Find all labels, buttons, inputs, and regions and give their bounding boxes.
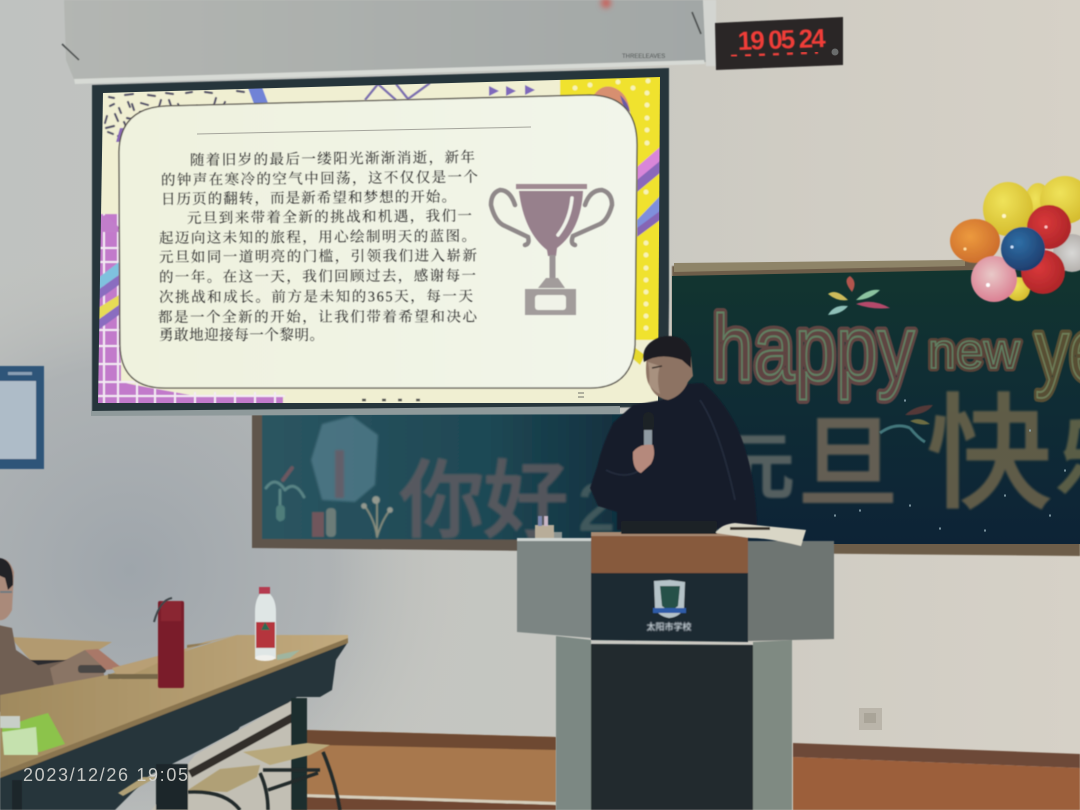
desk legs and beam	[190, 715, 297, 774]
slide body text: 随着旧岁的最后一缕阳光渐渐消逝，新年	[190, 148, 475, 169]
chalk text: happy new year: happy	[712, 296, 915, 400]
chalk text: happy new year: new	[928, 323, 1021, 379]
digital wall clock: 19 05 24	[737, 23, 827, 56]
corner purple wedge	[116, 128, 124, 142]
arrow icons	[489, 85, 535, 96]
light gap under desk	[150, 700, 292, 810]
orange semicircle	[592, 86, 630, 112]
front desk	[0, 635, 348, 810]
speaker	[590, 336, 757, 530]
chalk text: happy new year: happy	[712, 296, 915, 400]
chalk flower decoration	[828, 276, 890, 315]
digital wall clock	[715, 17, 843, 70]
projection screen	[91, 68, 669, 416]
slide body text: 元旦如同一道明亮的门槛，引领我们进入崭新	[159, 246, 478, 266]
right column	[753, 640, 792, 810]
top blue ribbon	[248, 87, 268, 104]
hair	[643, 336, 691, 368]
red thermos bottle	[154, 598, 184, 688]
slide body text	[158, 148, 478, 344]
chalk text: 元旦快乐	[740, 390, 1080, 510]
chalk drawing: plants	[266, 468, 393, 537]
photo timestamp: 2023/12/26 19:05	[23, 765, 188, 785]
chalk text: 2: 2	[578, 470, 615, 544]
podium	[517, 516, 834, 810]
chalk second flower decoration	[880, 405, 933, 442]
purple triangles outline	[365, 83, 430, 100]
laptop on podium	[621, 521, 717, 534]
chalk dust specks	[835, 400, 1065, 531]
chalk text: 元旦快乐: 快	[927, 386, 1051, 524]
slide body text: 的一年。在这一天，我们回顾过去，感谢每一	[159, 266, 476, 286]
wall baseboard and floor	[270, 729, 1080, 810]
wood top	[591, 534, 748, 573]
school emblem: 太阳市学校	[646, 621, 692, 632]
projector screen housing	[62, 0, 716, 84]
blackboard left	[252, 414, 640, 552]
left purple grid	[95, 214, 285, 404]
back desk	[10, 637, 212, 672]
bottles on podium	[535, 525, 554, 538]
jacket	[590, 383, 757, 530]
bottom border dots	[362, 399, 420, 401]
notebook	[716, 523, 806, 546]
lower right yellow wedge	[633, 348, 644, 366]
slide body text: 元旦到来带着全新的挑战和机遇，我们一	[187, 208, 472, 227]
slide body text: 勇敢地迎接每一个黎明。	[159, 327, 324, 344]
slide background	[95, 74, 665, 405]
right diagonal stripes	[636, 146, 660, 180]
water bottle	[255, 587, 300, 661]
slide body text: 起迈向这未知的旅程，用心绘制明天的蓝图。	[159, 227, 476, 247]
chalk text: 元旦快乐: 元	[722, 428, 794, 508]
slide divider line	[197, 127, 531, 134]
top-left speckle pattern	[105, 91, 244, 137]
right wing	[748, 541, 834, 641]
hand	[633, 445, 654, 473]
left wall notice board	[0, 366, 44, 469]
small slide footer mark	[578, 393, 584, 397]
desk front apron	[0, 642, 348, 810]
blackboard right	[672, 258, 1080, 556]
chalk text: happy new year	[712, 296, 1080, 400]
center column	[591, 644, 753, 810]
projector screen housing: THREELEAVES	[622, 54, 665, 60]
chalk text: 元旦快乐: 旦	[798, 408, 898, 520]
dark front	[591, 573, 748, 642]
right yellow panel with dots	[560, 74, 662, 340]
slide body text: 都是一个全新的开始，让我们带着希望和决心	[158, 307, 478, 326]
green plastic bag	[0, 713, 65, 755]
chalk text: 你好: 你好	[400, 454, 568, 548]
chalk drawing: gift box	[311, 416, 378, 502]
left wing	[517, 538, 591, 638]
head	[646, 356, 693, 400]
balloons	[950, 176, 1080, 302]
trophy icon	[491, 184, 612, 315]
student	[0, 558, 122, 712]
wall power socket	[859, 708, 882, 730]
slide body text: 次挑战和成长。前方是未知的365天，每一天	[159, 288, 474, 306]
chalk text: happy new year: new	[928, 323, 1021, 379]
slide content card	[119, 95, 637, 388]
microphone	[643, 412, 654, 432]
stools	[118, 743, 340, 810]
left column	[556, 636, 591, 810]
school emblem	[646, 580, 692, 632]
slide body text: 的钟声在寒冷的空气中回荡，这不仅仅是一个	[161, 168, 478, 189]
slide body text: 日历页的翻转，而是新希望和梦想的开始。	[161, 187, 456, 208]
